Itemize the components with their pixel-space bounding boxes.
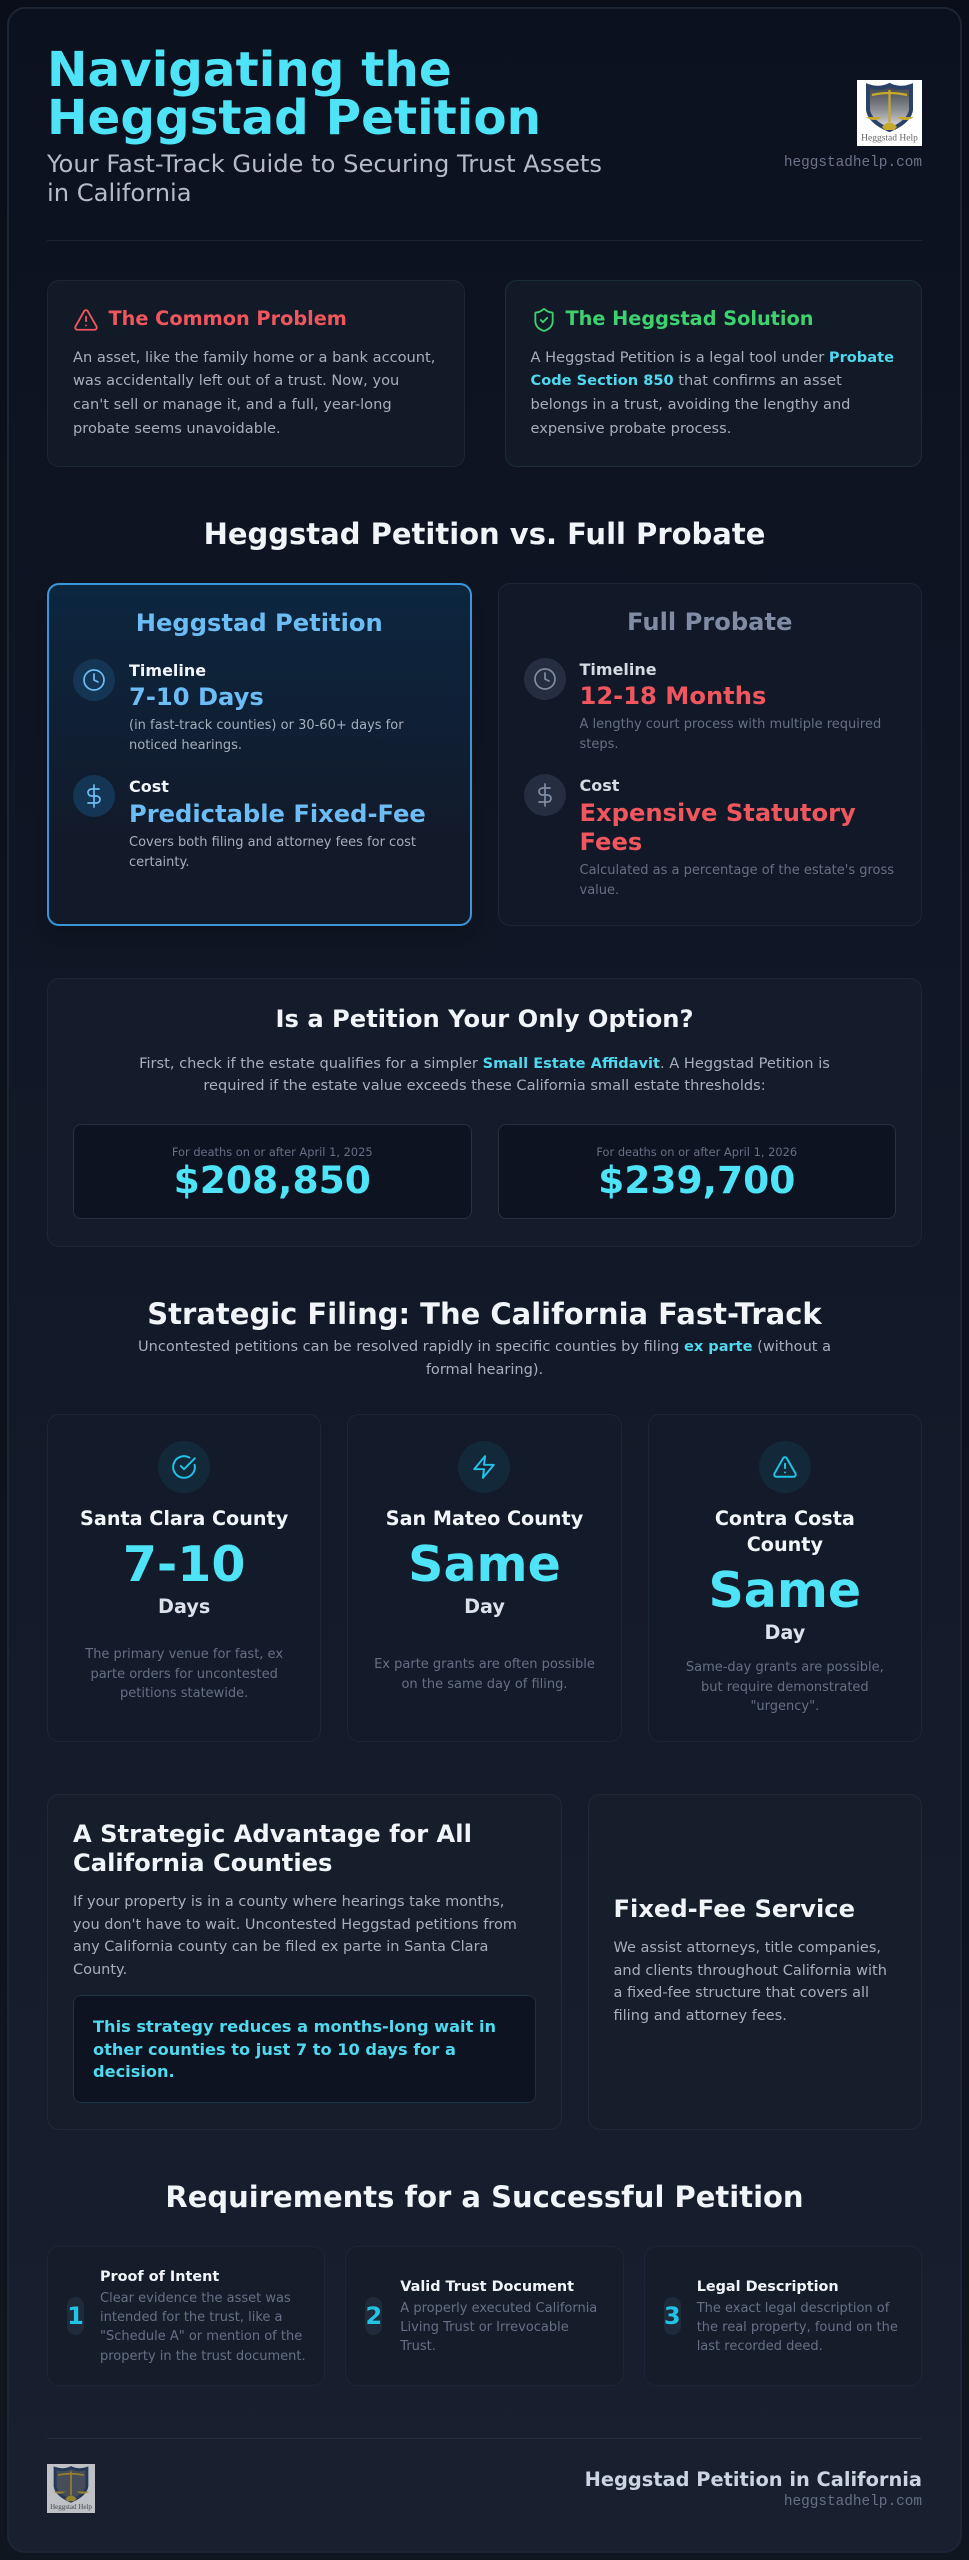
text: A properly executed California	[400, 2300, 597, 2316]
text: "Schedule A" or mention of the	[100, 2329, 302, 2344]
panel: strategic advantage	[47, 1794, 562, 2130]
cost row	[524, 774, 894, 898]
date: For deaths on or after April 1, 2026	[596, 1145, 797, 1159]
description: Ex parte grants are often possible	[374, 1657, 595, 1672]
title: Navigating the	[47, 42, 452, 98]
value: 7-10	[123, 1536, 245, 1593]
description	[374, 1657, 595, 1692]
text: you don't have to wait. Uncontested Heggstad petitions from	[73, 1917, 517, 1933]
heading	[73, 1820, 472, 1877]
title: Valid Trust Document	[400, 2278, 574, 2294]
panel: requirement 2	[345, 2246, 624, 2386]
unit: Days	[158, 1595, 210, 1618]
panel: common problem	[47, 280, 464, 467]
text	[400, 2300, 597, 2354]
value: Predictable Fixed-Fee	[129, 800, 426, 828]
heading: Is a Petition Your Only Option?	[276, 1005, 694, 1033]
note: Covers both filing and attorney fees for cost	[129, 835, 416, 850]
title: Heggstad Petition	[47, 90, 541, 146]
unit: Day	[464, 1595, 505, 1618]
icon: bolt	[458, 1441, 510, 1493]
description: "urgency".	[750, 1699, 819, 1714]
text: Trust.	[400, 2339, 436, 2354]
heading: The Common Problem	[108, 307, 347, 330]
intro text: Uncontested petitions can be resolved rapidly in specific counties by filing ex parte (without a	[138, 1338, 831, 1355]
label: Cost	[580, 776, 619, 795]
title: Legal Description	[697, 2278, 839, 2294]
note: A lengthy court process with multiple required	[580, 717, 881, 732]
county name: San Mateo County	[386, 1507, 583, 1530]
panel: heggstad solution	[504, 280, 922, 467]
text: required if the estate value exceeds these California small estate thresholds:	[203, 1077, 766, 1094]
heading: California Counties	[73, 1849, 332, 1877]
number: 2	[365, 2302, 382, 2330]
text	[73, 1894, 517, 1978]
description	[85, 1647, 283, 1701]
description	[686, 1660, 884, 1714]
panel: small estate option	[47, 978, 922, 1247]
note: value.	[580, 882, 619, 898]
icon: dollar	[73, 775, 115, 817]
value: Same	[408, 1536, 561, 1593]
county name: County	[747, 1533, 823, 1556]
heading: A Strategic Advantage for All	[73, 1820, 472, 1848]
text: was accidentally left out of a trust. Now, you	[73, 372, 399, 389]
heading: requirements: Requirements for a Successful Petition	[165, 2180, 804, 2214]
note	[129, 718, 404, 752]
title: Proof of Intent	[100, 2269, 219, 2285]
text: Clear evidence the asset was	[100, 2290, 291, 2306]
number: 3	[664, 2302, 681, 2330]
description: petitions statewide.	[120, 1686, 248, 1701]
subtitle	[47, 150, 602, 206]
divider	[47, 240, 922, 241]
panel: full probate column	[498, 583, 922, 926]
amount: $208,850	[174, 1158, 371, 1202]
value: Fees	[580, 828, 642, 856]
text: expensive probate process.	[530, 420, 731, 437]
text	[530, 348, 894, 437]
panel: heggstad petition column	[47, 583, 472, 926]
icon: clock	[524, 658, 566, 700]
note: (in fast-track counties) or 30-60+ days for	[129, 718, 404, 733]
icon: clock	[73, 659, 115, 701]
column title: Full Probate	[627, 608, 792, 636]
heading: Fixed-Fee Service	[614, 1895, 855, 1923]
subtitle: in California	[47, 178, 192, 206]
timeline row	[73, 659, 404, 752]
text: probate seems unavoidable.	[73, 420, 281, 437]
panel: santa clara	[47, 1414, 321, 1742]
value: Expensive Statutory	[580, 799, 856, 827]
text: County.	[73, 1962, 127, 1978]
heading: comparison: Heggstad Petition vs. Full Probate	[204, 517, 765, 551]
description: The primary venue for fast, ex	[85, 1647, 283, 1662]
text: The exact legal description of	[697, 2300, 889, 2316]
text: property in the trust document.	[100, 2349, 306, 2364]
threshold 2026	[498, 1124, 896, 1219]
logo	[857, 80, 922, 146]
divider	[47, 2438, 922, 2439]
description: but require demonstrated	[701, 1680, 869, 1694]
title	[47, 42, 541, 146]
column title: Heggstad Petition	[136, 609, 383, 637]
heading: The Heggstad Solution	[566, 307, 813, 330]
footer	[47, 2464, 922, 2513]
intro text	[138, 1338, 831, 1378]
logo: Heggstad Help	[861, 134, 918, 144]
timeline row	[524, 658, 881, 752]
text: We assist attorneys, title companies,	[614, 1940, 881, 1956]
county name	[715, 1507, 855, 1556]
amount: $239,700	[598, 1158, 795, 1202]
text: any California county can be filed ex parte in Santa Clara	[73, 1939, 488, 1955]
label: Timeline	[580, 660, 657, 679]
text	[73, 348, 435, 437]
text: filing and attorney fees.	[614, 2008, 787, 2024]
website: heggstadhelp.com	[784, 155, 922, 171]
text: Code Section 850 that confirms an asset	[530, 372, 842, 389]
footer title: Heggstad Petition in California	[585, 2468, 922, 2490]
text: Living Trust or Irrevocable	[400, 2320, 569, 2335]
panel: contra costa	[648, 1414, 922, 1742]
text: can't sell or manage it, and a full, year-long	[73, 396, 392, 413]
text: and clients throughout California with	[614, 1963, 887, 1979]
description: Same-day grants are possible,	[686, 1660, 884, 1675]
panel: fixed-fee service	[588, 1794, 922, 2130]
description: parte orders for uncontested	[90, 1666, 278, 1682]
county name: Contra Costa	[715, 1507, 855, 1530]
icon: warning triangle	[74, 309, 98, 331]
footer logo	[47, 2464, 95, 2513]
number: 1	[67, 2302, 84, 2330]
note	[129, 835, 416, 870]
icon: check circle	[158, 1441, 210, 1493]
callout text: decision.	[93, 2062, 175, 2081]
heading: strategic filing: Strategic Filing: The California Fast-Track	[147, 1297, 822, 1331]
county name: Santa Clara County	[80, 1507, 288, 1530]
text: last recorded deed.	[697, 2339, 823, 2354]
text	[139, 1055, 830, 1094]
callout	[73, 1995, 536, 2103]
panel: requirement 3	[644, 2246, 922, 2386]
label: Cost	[129, 777, 169, 796]
text	[100, 2290, 306, 2364]
footer website: heggstadhelp.com	[784, 2494, 922, 2510]
subtitle: Your Fast-Track Guide to Securing Trust Assets	[47, 150, 602, 178]
text	[614, 1940, 887, 2024]
text: An asset, like the family home or a bank account,	[73, 348, 435, 366]
callout text	[93, 2017, 496, 2081]
icon: shield check	[534, 308, 554, 332]
footer logo: Heggstad Help	[50, 2503, 92, 2511]
text: a fixed-fee structure that covers all	[614, 1985, 869, 2001]
description: on the same day of filing.	[401, 1676, 568, 1692]
icon: warning	[759, 1441, 811, 1493]
callout text: This strategy reduces a months-long wait in	[93, 2017, 496, 2036]
note: Calculated as a percentage of the estate's gross	[580, 863, 894, 878]
cost row	[73, 775, 426, 870]
note: steps.	[580, 736, 619, 752]
label: Timeline	[129, 661, 206, 680]
text: belongs in a trust, avoiding the lengthy and	[530, 396, 850, 413]
header	[47, 42, 922, 206]
text: the real property, found on the	[697, 2320, 898, 2335]
text: First, check if the estate qualifies for a simpler Small Estate Affidavit. A Heggstad Petition is	[139, 1055, 830, 1072]
icon: dollar	[524, 774, 566, 816]
text: A Heggstad Petition is a legal tool under Probate	[530, 348, 894, 366]
note	[580, 863, 894, 898]
callout text: other counties to just 7 to 10 days for a	[93, 2040, 456, 2059]
text	[696, 2300, 898, 2354]
date: For deaths on or after April 1, 2025	[172, 1145, 373, 1159]
value: 7-10 Days	[129, 683, 264, 711]
note	[580, 717, 881, 752]
note: certainty.	[129, 854, 189, 870]
value: 12-18 Months	[580, 682, 766, 710]
panel: requirement 1	[47, 2246, 325, 2386]
unit: Day	[764, 1621, 805, 1644]
value: Same	[708, 1562, 861, 1619]
threshold 2025	[73, 1124, 472, 1219]
text: If your property is in a county where hearings take months,	[73, 1894, 504, 1910]
intro text: formal hearing).	[426, 1361, 543, 1378]
panel: san mateo	[347, 1414, 622, 1742]
value	[580, 799, 856, 856]
note: noticed hearings.	[129, 738, 242, 752]
text: intended for the trust, like a	[100, 2310, 282, 2325]
